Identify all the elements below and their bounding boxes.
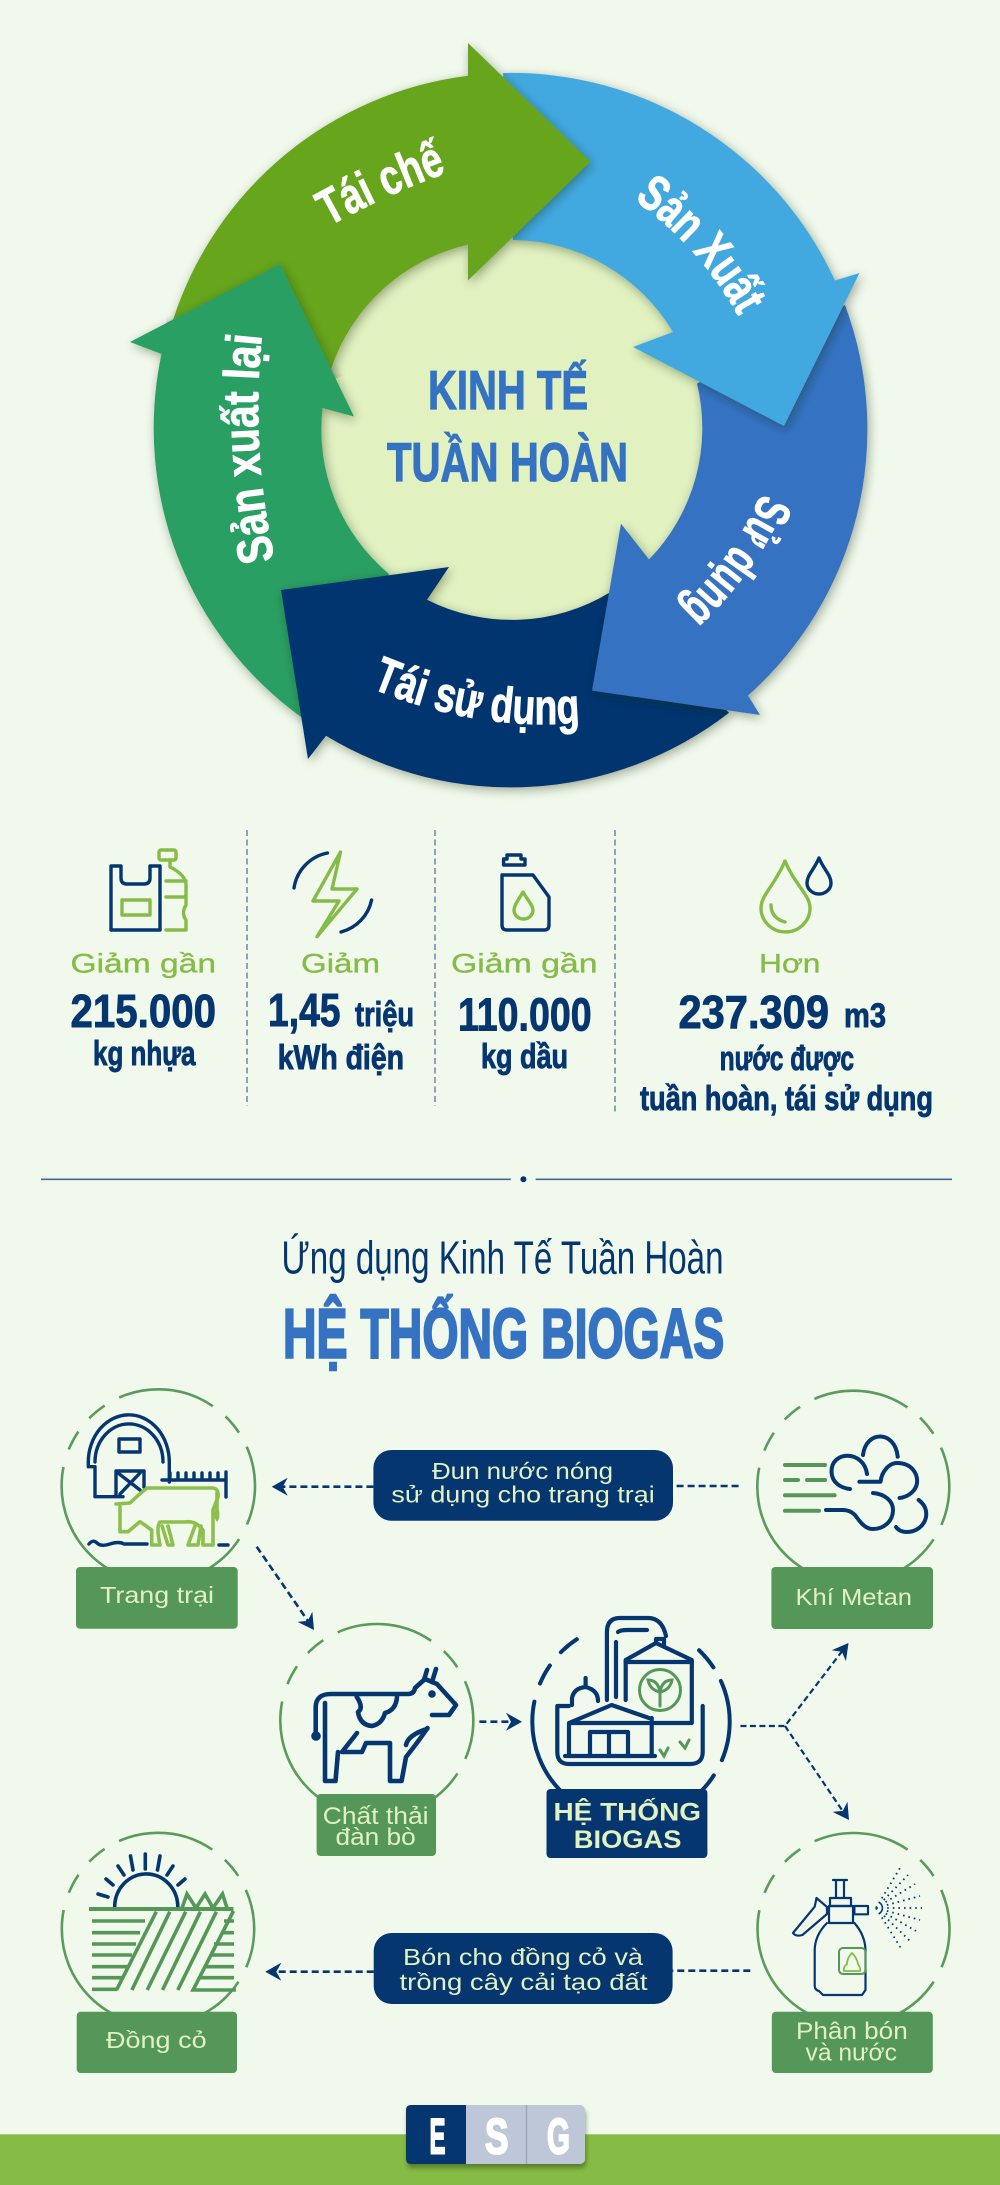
arrow: metan heat back to farm <box>272 1478 739 1496</box>
stat: plastic: Giảm gần <box>70 949 216 979</box>
stat: electricity <box>268 852 414 1077</box>
centre title: KINH TẾ <box>428 359 588 421</box>
label: Sản xuất lại: Sản xuất lại <box>219 334 274 564</box>
icon: gas cloud <box>785 1436 926 1532</box>
icon: bag and bottle <box>111 850 186 930</box>
label <box>77 2012 237 2073</box>
arrow: fertilizer to pasture <box>265 1963 750 1981</box>
stat: oil: 110.000 <box>458 989 592 1041</box>
logo: ESG: S <box>485 2108 508 2164</box>
label: Tái chế: Tái chế <box>312 136 444 223</box>
logo: ESG: E <box>430 2108 446 2164</box>
footer bar <box>0 2134 1000 2185</box>
label: Sản Xuất: Sản Xuất <box>638 176 766 316</box>
node: Khí Metan <box>757 1391 949 1629</box>
icon: dairy cow <box>314 1669 456 1781</box>
label <box>76 1567 238 1629</box>
node: Chất thải đàn bò <box>280 1624 473 1856</box>
callout: Đun nước nóng <box>373 1450 673 1521</box>
stat: water: nước được <box>720 1040 854 1078</box>
label: Sử dụng: Sử dụng <box>678 496 790 626</box>
centre circle <box>316 234 706 624</box>
label <box>772 2012 933 2073</box>
stat: oil: kg dầu <box>481 1038 568 1076</box>
label <box>317 1794 436 1856</box>
arrow: Sản Xuất <box>503 73 860 426</box>
icon: spray bottle <box>793 1868 922 1995</box>
label: HỆ THỐNG <box>554 1797 701 1827</box>
stat: water: Hơn <box>759 949 820 979</box>
arrow: Tái chế <box>173 43 590 369</box>
callout: Đun nước nóng: Đun nước nóng <box>432 1458 613 1484</box>
arrow: farm to cow <box>257 1547 321 1635</box>
logo: ESG: G <box>547 2108 570 2164</box>
heading: HỆ THỐNG BIOGAS <box>283 1293 724 1372</box>
callout: Bón cho đồng cỏ: trồng cây cải tạo đất <box>400 1969 648 1995</box>
callout: Đun nước nóng: sử dụng cho trang trại <box>391 1482 655 1508</box>
label: đàn bò <box>336 1824 416 1851</box>
arrow: Tái sử dụng <box>281 567 729 787</box>
node: Phân bón và nước <box>758 1833 950 2073</box>
centre title <box>387 359 628 493</box>
stat: plastic: 215.000 <box>70 985 216 1037</box>
stat: water: tuần hoàn, tái sử dụng <box>640 1080 933 1118</box>
arrow: cow to biogas <box>479 1713 522 1731</box>
circular economy cycle <box>130 43 876 797</box>
icon: lightning bolt <box>294 852 372 937</box>
stat: electricity: Giảm <box>301 949 380 979</box>
callout: Bón cho đồng cỏ: Bón cho đồng cỏ và <box>403 1944 643 1970</box>
stat: electricity: 1,45 <box>268 984 340 1036</box>
heading <box>282 1231 724 1372</box>
stat: plastic: kg nhựa <box>93 1035 196 1073</box>
heading: Ứng dụng Kinh Tế Tuần Hoàn <box>282 1231 724 1283</box>
icon: oil can <box>502 855 549 930</box>
label: Tái sử dụng: Tái sử dụng <box>378 656 578 735</box>
stat: electricity: kWh điện <box>278 1039 404 1077</box>
node: Trang trại <box>62 1389 255 1629</box>
stat dividers <box>247 830 615 1113</box>
arrow: biogas branching to metan and fertilizer <box>740 1638 856 1825</box>
stat: plastic <box>70 850 216 1073</box>
label: và nước <box>806 2040 897 2067</box>
stat: oil: Giảm gần <box>451 949 598 979</box>
icon: barn and cow <box>88 1415 228 1545</box>
centre title: TUẦN HOÀN <box>387 431 628 493</box>
callout: Bón cho đồng cỏ <box>374 1933 673 2004</box>
stat: water: m3 <box>844 997 886 1035</box>
stat: water: 237.309 <box>678 986 829 1038</box>
label: Chất thải <box>323 1803 428 1830</box>
label <box>546 1789 707 1858</box>
label: Đồng cỏ <box>106 2027 207 2053</box>
icon: water drops <box>761 858 831 932</box>
label: Phân bón <box>796 2018 908 2045</box>
section divider <box>41 1176 952 1182</box>
icon: biogas plant <box>557 1618 703 1764</box>
arrow: Sử dụng <box>592 305 867 715</box>
stat: water <box>640 858 933 1118</box>
icon: field and sun <box>89 1854 236 1990</box>
stat: oil <box>451 855 598 1076</box>
node: Hệ thống Biogas <box>532 1618 730 1858</box>
label <box>771 1567 933 1629</box>
node: Đồng cỏ <box>62 1833 254 2073</box>
label: Khí Metan <box>796 1584 912 1610</box>
logo: ESG <box>406 2105 585 2164</box>
label: Trang trại <box>100 1582 214 1608</box>
label: BIOGAS <box>574 1826 681 1854</box>
arrow head overlap: Sản xuất lại <box>166 264 342 378</box>
arrow: Sản xuất lại <box>130 264 389 718</box>
stat: electricity: triệu <box>355 996 414 1034</box>
